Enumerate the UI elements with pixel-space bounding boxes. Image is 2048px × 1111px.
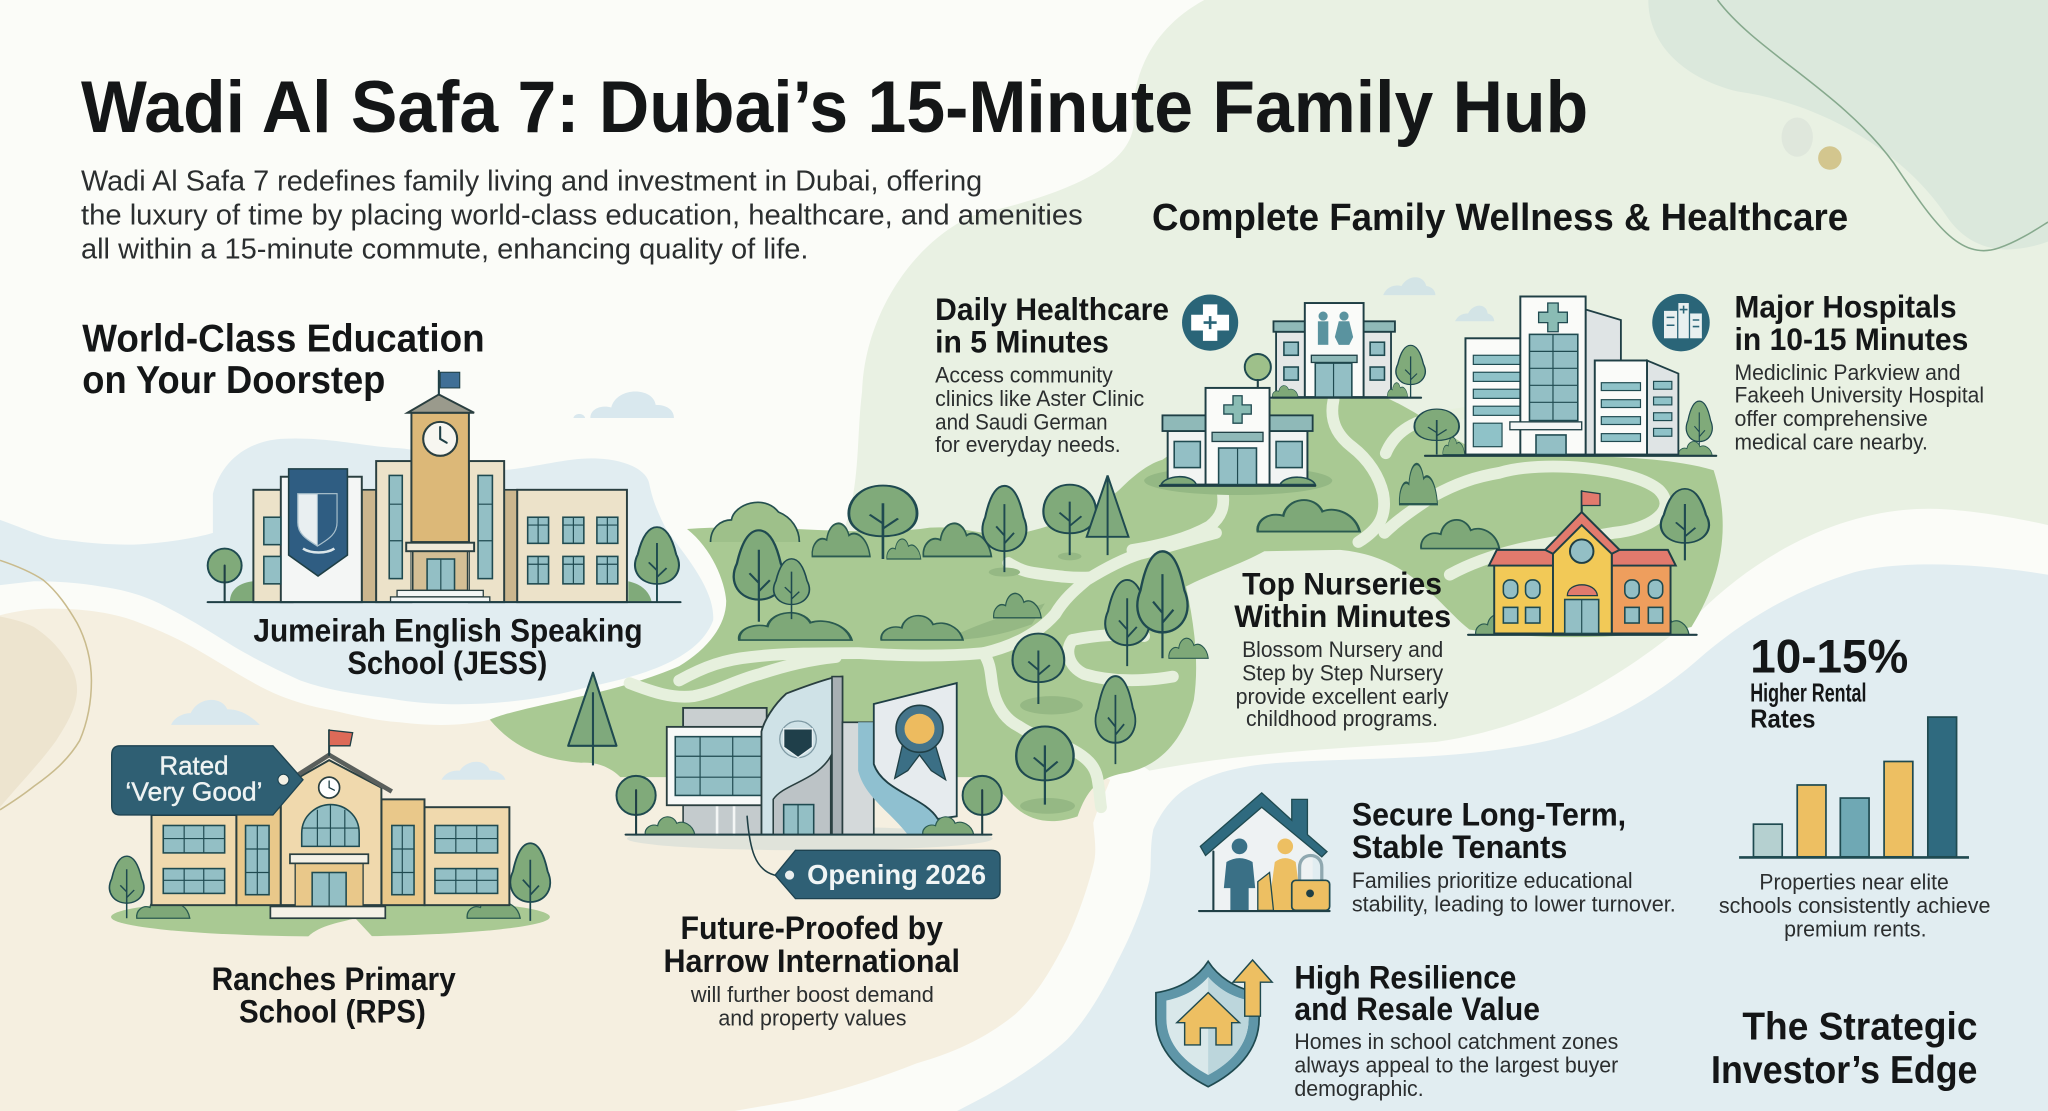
text block: Daily Healthcare: Daily Healthcare [935, 292, 1169, 327]
intro paragraph [81, 166, 1083, 266]
hill paths [630, 400, 1665, 807]
text block: Secure Long-Term [1352, 795, 1676, 917]
label: RPS: Ranches Primary [212, 960, 456, 997]
intro paragraph: the luxury of time by placing world-class education, healthcare, and amenities [81, 200, 1083, 232]
tag: Opening 2026 [775, 850, 1000, 899]
text block: Daily Healthcare: Access community [935, 363, 1114, 388]
title: Wadi Al Safa 7: Dubai’s 15-Minute Family Hub [81, 67, 1588, 148]
text block: Secure Long-Term: Families prioritize educational [1352, 868, 1633, 893]
stat: 10-15% higher rental rates [1750, 630, 1908, 734]
chart caption: premium rents. [1784, 917, 1927, 942]
stat: 10-15% higher rental rates: Rates [1750, 704, 1816, 734]
background: pale green region [836, 0, 2048, 771]
icon: hospital [1652, 294, 1710, 351]
clouds [171, 277, 1494, 780]
illustration: Harrow International [616, 677, 1002, 850]
text block: High Resilience: demographic. [1294, 1076, 1424, 1101]
text block: Secure Long-Term: Secure Long-Term, [1352, 795, 1626, 832]
background: pale blue river and school lake [0, 438, 713, 704]
chart caption: schools consistently achieve [1719, 893, 1991, 918]
heading: strategic investor: The Strategic [1742, 1006, 1977, 1049]
icon: shield with house and arrow [1156, 960, 1272, 1087]
background: sand region [0, 609, 1110, 1111]
illustration: JESS school building [208, 371, 680, 602]
text block: High Resilience: and Resale Value [1294, 990, 1540, 1027]
tag: Rated Very Good [112, 746, 303, 815]
text block: High Resilience: always appeal to the largest buyer [1294, 1052, 1619, 1077]
label: Harrow International [664, 909, 960, 1030]
background: dark sand blob [0, 616, 77, 807]
heading: education: World-Class Education [82, 317, 485, 360]
text block: Major Hospitals: Major Hospitals [1735, 289, 1957, 324]
text block: Daily Healthcare: clinics like Aster Clinic [935, 386, 1144, 411]
intro paragraph: Wadi Al Safa 7 redefines family living and investment in Dubai, offering [81, 166, 982, 198]
tag: Rated Very Good: Rated [159, 751, 229, 781]
text block: Secure Long-Term: Stable Tenants [1352, 828, 1567, 865]
text block: Secure Long-Term: stability, leading to lower turnover. [1352, 892, 1676, 917]
text block: Daily Healthcare: in 5 Minutes [935, 325, 1109, 360]
heading: education: on Your Doorstep [82, 359, 385, 402]
label: Harrow International: Harrow International [664, 942, 960, 979]
text block: High Resilience: High Resilience [1294, 959, 1516, 996]
text block: Top Nurseries: Blossom Nursery and [1242, 637, 1443, 662]
label: JESS: School (JESS) [347, 644, 547, 681]
text block: Top Nurseries: Top Nurseries [1242, 566, 1442, 601]
text block: Major Hospitals: medical care nearby. [1735, 429, 1928, 454]
text block: Top Nurseries [1234, 566, 1451, 731]
text block: Major Hospitals: Fakeeh University Hospital [1735, 382, 1984, 407]
label: Harrow International: Future-Proofed by [680, 909, 943, 946]
text block: High Resilience [1294, 959, 1619, 1101]
illustration: nursery building [1468, 491, 1697, 635]
hill shadow patches [947, 552, 1083, 814]
text block: Top Nurseries: Step by Step Nursery [1242, 660, 1444, 685]
illustration: upper clinic [1245, 303, 1425, 398]
chart caption: Properties near elite [1759, 869, 1949, 894]
stat: 10-15% higher rental rates: 10-15% [1750, 630, 1908, 683]
label: RPS: School (RPS) [239, 993, 426, 1030]
heading: strategic investor [1711, 1006, 1977, 1092]
background: darker green corner [1648, 0, 2048, 249]
heading: wellness and healthcare: Complete Family Wellness & Healthcare [1152, 197, 1848, 239]
bar chart [1739, 717, 1969, 857]
hill trees and bushes [711, 409, 1709, 805]
label: JESS [253, 611, 643, 681]
illustration: major hospital [1425, 296, 1716, 456]
heading: education [82, 317, 485, 402]
stat: 10-15% higher rental rates: Higher Rental [1750, 677, 1866, 707]
illustration: Ranches Primary School [110, 730, 550, 937]
text block: High Resilience: Homes in school catchment zones [1294, 1029, 1618, 1054]
background: pale blue investor region [956, 564, 2048, 1111]
tall conifer [568, 673, 616, 765]
decorative thin curves [0, 0, 2048, 810]
intro paragraph: all within a 15-minute commute, enhancing quality of life. [81, 234, 808, 266]
heading: strategic investor: Investor’s Edge [1711, 1049, 1977, 1092]
label: RPS [212, 960, 456, 1030]
text block: Major Hospitals: Mediclinic Parkview and [1735, 360, 1960, 385]
tag: Rated Very Good: ‘Very Good’ [125, 777, 263, 807]
decorative dots [1782, 118, 1842, 170]
text block: Top Nurseries: childhood programs. [1246, 706, 1438, 731]
text block: Top Nurseries: Within Minutes [1234, 599, 1451, 634]
label: Harrow International: and property values [718, 1005, 906, 1030]
callout line: Opening 2026 [747, 816, 775, 875]
label: JESS: Jumeirah English Speaking [253, 611, 643, 648]
icon: family home with lock [1199, 793, 1330, 911]
central green hill [490, 385, 1723, 821]
text block: Major Hospitals: in 10-15 Minutes [1735, 322, 1968, 357]
text block: Daily Healthcare [935, 292, 1169, 457]
text block: Top Nurseries: provide excellent early [1236, 684, 1449, 709]
label: Harrow International: will further boost demand [690, 982, 934, 1007]
text block: Major Hospitals [1735, 289, 1984, 454]
tag: Opening 2026: Opening 2026 [807, 859, 986, 890]
chart caption [1719, 869, 1991, 942]
illustration: lower clinic [1144, 388, 1332, 495]
text block: Major Hospitals: offer comprehensive [1735, 406, 1928, 431]
icon: clinic cross [1182, 295, 1238, 351]
text block: Daily Healthcare: for everyday needs. [935, 432, 1121, 457]
text block: Daily Healthcare: and Saudi German [935, 410, 1108, 435]
